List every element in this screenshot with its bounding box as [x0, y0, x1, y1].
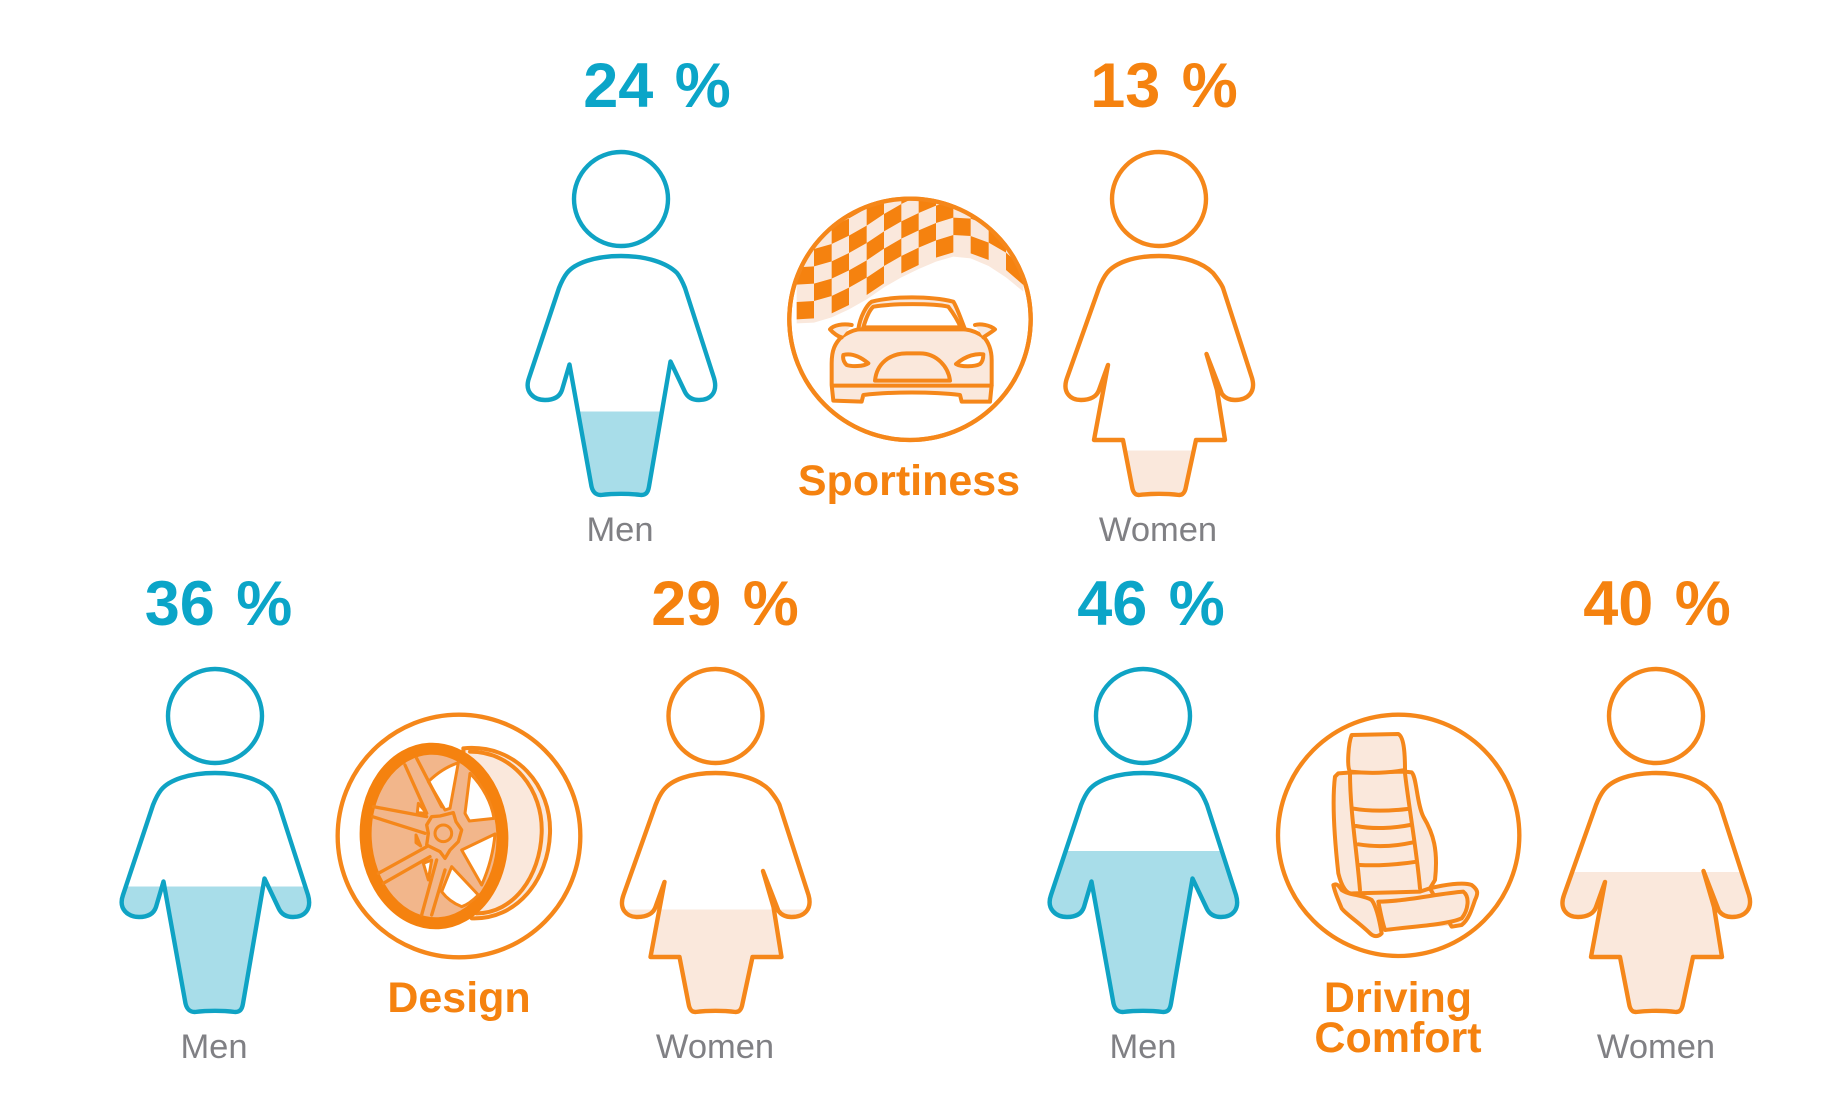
- figure: man filled to 36 %: [122, 669, 309, 1012]
- heading: Driving Comfort: Comfort: [1314, 1014, 1482, 1062]
- label: Men: Men: [586, 511, 654, 549]
- heading: Sportiness: Sportiness: [798, 457, 1020, 505]
- label: Women: Women: [1597, 1028, 1715, 1066]
- heading: Driving Comfort: Driving: [1324, 974, 1472, 1022]
- icon: alloy wheel: [338, 715, 580, 957]
- percentage: men driving comfort 46 %: 46 %: [1077, 569, 1225, 639]
- percentage: men sportiness 24 %: 24 %: [583, 51, 731, 121]
- label: Women: Women: [1099, 511, 1217, 549]
- figure: man filled to 46 %: [1050, 669, 1237, 1012]
- figure: woman filled to 13 %: [1065, 152, 1253, 495]
- label: Men: Men: [180, 1028, 248, 1066]
- percentage: men design 36 %: 36 %: [145, 569, 292, 639]
- label: Women: Women: [656, 1028, 774, 1066]
- icon: car seat: [1278, 715, 1519, 956]
- percentage: women design 29 %: 29 %: [651, 569, 799, 639]
- icon: racing car and checkered flag: [789, 178, 1031, 440]
- percentage: women driving comfort 40 %: 40 %: [1583, 569, 1731, 639]
- heading: Design: Design: [387, 974, 531, 1022]
- percentage: women sportiness 13 %: 13 %: [1090, 51, 1238, 121]
- figure: man filled to 24 %: [528, 152, 715, 495]
- label: Men: Men: [1109, 1028, 1177, 1066]
- figure: woman filled to 40 %: [1562, 669, 1750, 1012]
- figure: woman filled to 29 %: [622, 669, 810, 1012]
